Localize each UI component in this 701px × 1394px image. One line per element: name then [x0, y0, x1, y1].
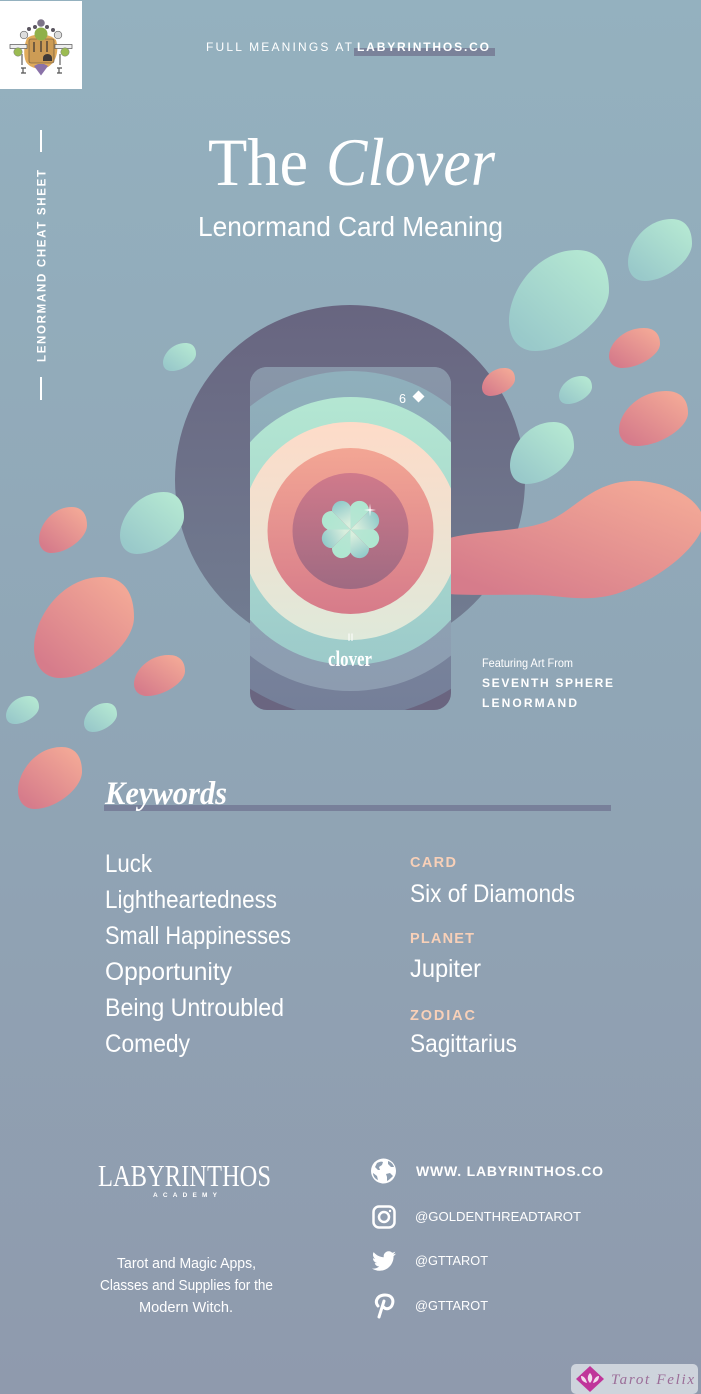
keyword list [105, 850, 291, 1058]
vertical label: Lenormand cheat sheet: LENORMAND CHEAT SHEET [36, 170, 48, 362]
salmon blobs [18, 328, 688, 809]
tagline: Modern Witch. [139, 1299, 233, 1316]
art credit: Featuring Art From [482, 656, 573, 670]
watermark badge [571, 1364, 698, 1394]
tagline: Classes and Supplies for the [100, 1277, 273, 1294]
icon: globe [371, 1158, 396, 1184]
roman numeral: II [348, 632, 354, 644]
correspondences: PLANET [410, 931, 474, 947]
large salmon wave blob [440, 481, 701, 598]
icon: instagram [374, 1206, 394, 1228]
website: WWW. LABYRINTHOS.CO [416, 1163, 603, 1179]
correspondences: Sagittarius [410, 1030, 517, 1058]
icon: pinterest [376, 1295, 393, 1317]
tarot card [250, 367, 451, 710]
keyword list: Being Untroubled [105, 994, 284, 1022]
title [208, 124, 495, 200]
top link: full meanings: LABYRINTHOS.CO [357, 40, 489, 54]
logo: crest emblem [0, 1, 82, 89]
art credit: LENORMAND [482, 696, 577, 710]
tagline [100, 1255, 273, 1316]
pinterest handle: @GTTAROT [415, 1299, 488, 1313]
top link: full meanings: FULL MEANINGS AT [206, 40, 353, 54]
title: The [208, 124, 308, 200]
subtitle: Lenormand Card Meaning [198, 211, 503, 242]
art credit [482, 656, 613, 710]
top link: full meanings [206, 40, 495, 56]
watermark text: Tarot Felix [611, 1372, 694, 1388]
tagline: Tarot and Magic Apps, [117, 1255, 256, 1272]
Labyrinthos logo: LABYRINTHOS [98, 1158, 271, 1193]
keyword list: Lightheartedness [105, 886, 277, 914]
icon: twitter [372, 1251, 396, 1271]
keyword list: Comedy [105, 1030, 190, 1058]
title: Clover [326, 124, 495, 200]
card number: 6 [399, 392, 406, 406]
icon: sparkle [364, 504, 376, 516]
keyword list: Small Happinesses [105, 922, 291, 950]
icon: four-leaf clover [322, 501, 379, 558]
correspondences: Jupiter [410, 955, 481, 983]
keyword list: Luck [105, 850, 152, 878]
keyword list: Opportunity [105, 958, 232, 986]
correspondences [410, 855, 575, 1058]
card name: clover [328, 646, 372, 671]
dark circle behind card [175, 305, 525, 655]
icon: lotus diamond [576, 1366, 604, 1392]
instagram handle: @GOLDENTHREADTAROT [415, 1210, 581, 1224]
twitter handle: @GTTAROT [415, 1254, 488, 1268]
Labyrinthos logo: ACADEMY [153, 1192, 218, 1199]
art credit: SEVENTH SPHERE [482, 676, 613, 690]
mint blobs [6, 219, 692, 732]
Labyrinthos logo [98, 1158, 271, 1199]
icon: diamond suit [412, 390, 424, 402]
correspondences: Six of Diamonds [410, 880, 575, 908]
correspondences: CARD [410, 855, 456, 871]
keywords heading: Keywords [104, 776, 227, 812]
keywords heading [104, 776, 611, 812]
correspondences: ZODIAC [410, 1008, 476, 1024]
